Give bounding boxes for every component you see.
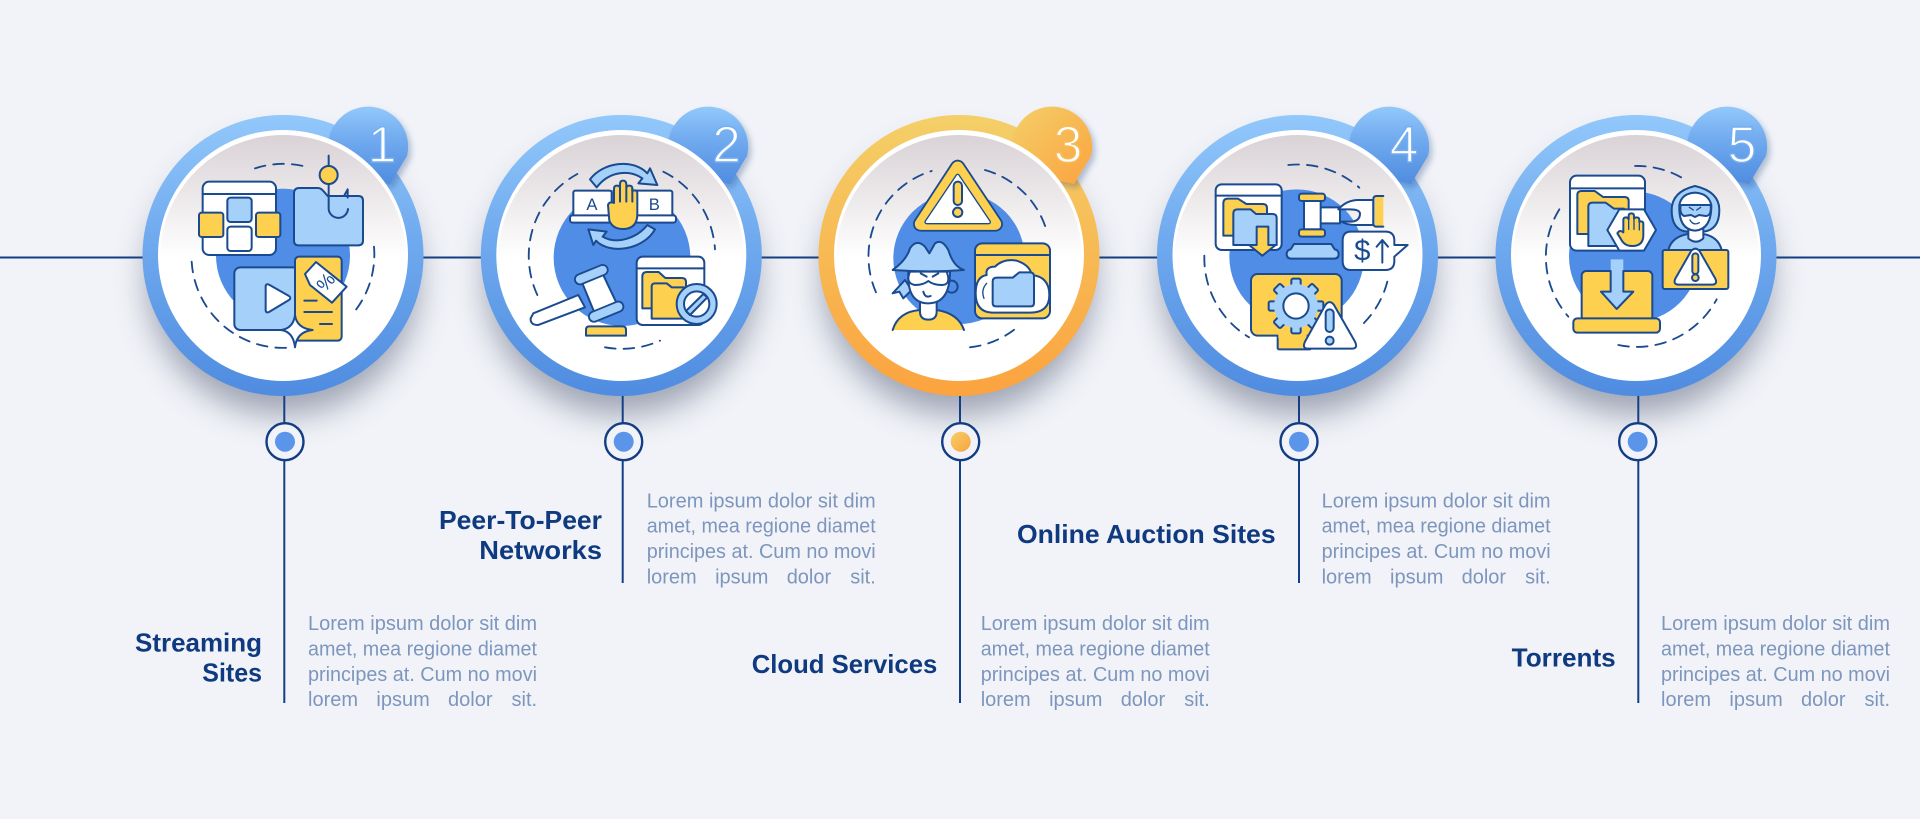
text block 3	[981, 613, 1210, 711]
text block 1: Lorem ipsum dolor sit dim	[308, 613, 537, 635]
heading: streaming sites: Streaming	[135, 628, 262, 658]
text block 5: principes at. Cum no movi	[1661, 664, 1890, 686]
text block 1: lorem	[308, 689, 358, 711]
ring 2	[481, 115, 762, 396]
text block 4: principes at. Cum no movi	[1322, 541, 1551, 563]
heading: streaming sites: Sites	[202, 658, 262, 688]
heading: peer-to-peer networks	[439, 505, 602, 565]
ring 1	[142, 115, 424, 396]
icon: streaming, folder hook, video and coupon	[192, 156, 374, 348]
heading: peer-to-peer networks: Networks	[479, 535, 602, 565]
dot 1	[266, 423, 304, 460]
text block 1	[308, 613, 537, 711]
panel: step 1 streaming sites	[135, 107, 537, 711]
panel: step 4 online auction sites	[1017, 107, 1551, 588]
number 5: 5	[1728, 116, 1756, 173]
disc 2	[496, 130, 746, 381]
dot 3	[942, 423, 979, 460]
dot 5	[1619, 423, 1656, 460]
dot 2	[605, 423, 642, 460]
icon: blocked folder, hacker and torrent download	[1546, 166, 1728, 347]
badge 5	[1687, 107, 1767, 184]
text block 4	[1322, 490, 1551, 588]
panel: step 5 torrents	[1496, 107, 1890, 711]
badge 4	[1349, 107, 1429, 184]
icon: A/B blocking hand, gavel and blocked folder: B	[649, 195, 660, 214]
disc 4	[1172, 130, 1422, 381]
text block 1: dolor	[448, 689, 493, 711]
text block 3: dolor	[1121, 689, 1166, 711]
badge 2	[668, 107, 748, 184]
text block 3: ipsum	[1049, 689, 1102, 711]
timeline axis	[0, 256, 1920, 258]
text block 4: Lorem ipsum dolor sit dim	[1322, 490, 1551, 512]
text block 3: principes at. Cum no movi	[981, 664, 1210, 686]
number 1: 1	[368, 116, 396, 173]
badge 1	[328, 107, 408, 184]
panel: step 3 cloud services	[752, 107, 1210, 711]
badge 3	[1012, 107, 1092, 184]
text block 5: lorem	[1661, 689, 1711, 711]
icon: A/B blocking hand, gavel and blocked folder	[529, 164, 717, 349]
text block 1: sit.	[512, 689, 537, 711]
text block 3: lorem	[981, 689, 1031, 711]
text block 2: principes at. Cum no movi	[647, 541, 876, 563]
text block 4: ipsum	[1390, 566, 1443, 588]
heading: cloud services: Cloud Services	[752, 649, 937, 679]
heading: online auction sites: Online Auction Sites	[1017, 519, 1276, 549]
text block 1: amet, mea regione diamet	[308, 638, 537, 660]
text block 3: Lorem ipsum dolor sit dim	[981, 613, 1210, 635]
text block 5: sit.	[1864, 689, 1890, 711]
disc 3	[834, 130, 1084, 381]
text block 2: lorem	[647, 566, 697, 588]
icon: A/B blocking hand, gavel and blocked folder: A	[586, 195, 598, 214]
text block 2: amet, mea regione diamet	[647, 516, 876, 538]
icon: warning, pirate and cloud folder	[868, 167, 1050, 347]
text block 5: amet, mea regione diamet	[1661, 638, 1890, 660]
icon: streaming, folder hook, video and coupon: %	[313, 269, 340, 296]
text block 4: lorem	[1322, 566, 1372, 588]
text block 5: ipsum	[1729, 689, 1783, 711]
text block 4: amet, mea regione diamet	[1322, 516, 1551, 538]
heading: torrents: Torrents	[1512, 643, 1616, 673]
text block 4: sit.	[1525, 566, 1551, 588]
ring 5	[1496, 115, 1776, 396]
heading: peer-to-peer networks: Peer-To-Peer	[439, 505, 602, 535]
number 4: 4	[1390, 116, 1418, 173]
text block 5: dolor	[1801, 689, 1846, 711]
text block 2: dolor	[787, 566, 832, 588]
text block 1: ipsum	[376, 689, 430, 711]
text block 2: Lorem ipsum dolor sit dim	[647, 490, 876, 512]
disc 1	[158, 130, 408, 381]
disc 5	[1511, 130, 1761, 381]
text block 4: dolor	[1462, 566, 1506, 588]
text block 3: amet, mea regione diamet	[981, 638, 1210, 660]
panel: step 2 peer-to-peer networks	[439, 107, 876, 588]
text block 2	[647, 490, 876, 588]
icon: folder download, auction gavel, price and settings warning	[1204, 164, 1408, 349]
ring 3	[818, 115, 1100, 396]
number 3: 3	[1054, 116, 1082, 173]
text block 1: principes at. Cum no movi	[308, 664, 537, 686]
icon: folder download, auction gavel, price and settings warning: $	[1354, 235, 1370, 268]
text block 2: ipsum	[715, 566, 768, 588]
ring 4	[1157, 115, 1438, 396]
text block 3: sit.	[1184, 689, 1210, 711]
dot 4	[1280, 423, 1318, 460]
text block 2: sit.	[850, 566, 876, 588]
text block 5: Lorem ipsum dolor sit dim	[1661, 613, 1890, 635]
number 2: 2	[712, 116, 741, 173]
heading: streaming sites	[135, 628, 262, 688]
text block 5	[1661, 613, 1890, 711]
